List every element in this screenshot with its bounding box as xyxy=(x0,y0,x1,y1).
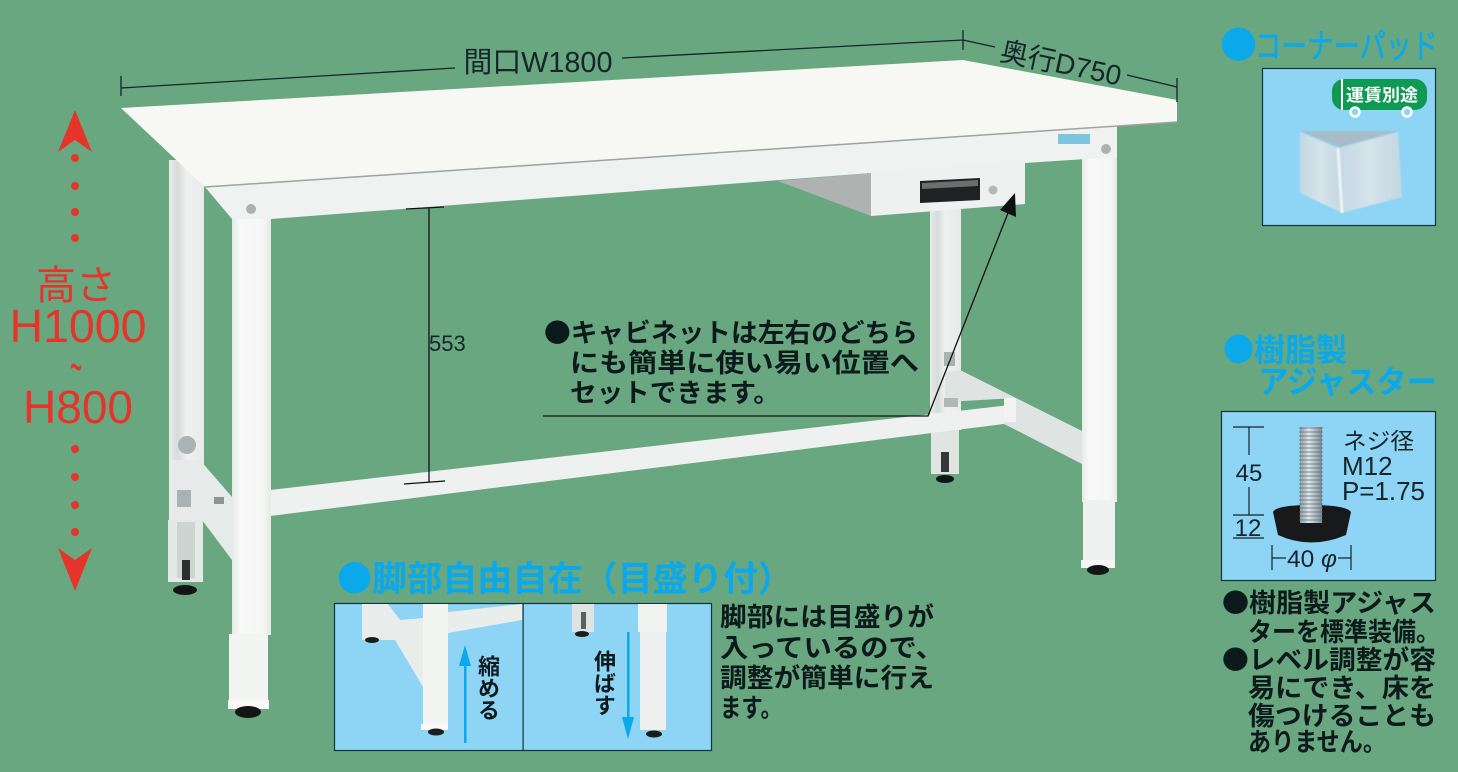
panel: adjuster xyxy=(1222,412,1436,580)
red down arrow xyxy=(58,548,92,591)
leg adjustment description: 調整が簡単に行え xyxy=(720,658,934,695)
brand label xyxy=(1058,134,1090,144)
shrink arrow xyxy=(459,645,471,743)
adjuster description xyxy=(1222,583,1440,759)
workbench illustration xyxy=(121,60,1177,718)
right side brace xyxy=(944,370,1082,464)
callout: cabinet: セットできます。 xyxy=(570,373,780,410)
adjuster description: ありません。 xyxy=(1248,722,1386,759)
adjuster description: 傷つけることも xyxy=(1248,696,1436,733)
height range xyxy=(10,110,147,591)
dimension: 45 and 12: 45 xyxy=(1236,460,1262,487)
front left leg xyxy=(228,190,271,718)
table apron xyxy=(205,125,1117,219)
leg adjustment description: 入っているので、 xyxy=(720,628,944,665)
extend label: 伸ばす xyxy=(589,650,621,716)
depth dimension xyxy=(963,36,1177,102)
back left leg xyxy=(168,160,204,595)
callout: cabinet xyxy=(543,193,1016,416)
height text: ~ xyxy=(70,336,82,399)
width dimension xyxy=(121,30,963,96)
depth dimension: 奥行D750 xyxy=(998,36,1124,91)
leader arrow xyxy=(543,213,1008,416)
left side brace xyxy=(170,436,232,560)
height text xyxy=(10,264,147,433)
dimension: 45 and 12: 12 xyxy=(1235,515,1261,542)
callout: cabinet: にも簡単に使い易い位置へ xyxy=(570,343,919,380)
leg adjustment description: 脚部には目盛りが xyxy=(720,597,934,634)
callout text: ●キャビネットは左右のどちら xyxy=(544,313,918,350)
thread specification: ネジ径 xyxy=(1343,428,1414,454)
dimension: 40 phi xyxy=(1272,545,1351,573)
heading: corner pad: ● xyxy=(1220,15,1257,69)
shrink label: 縮める xyxy=(473,655,505,721)
panel: leg adjustment xyxy=(334,603,712,750)
dimension: 40 phi: 40 φ xyxy=(1287,546,1337,573)
height text: H1000 xyxy=(10,300,147,352)
badge: shipping extra: 運賃別途 xyxy=(1346,86,1418,105)
leg adjustment description: ます。 xyxy=(720,688,782,725)
extend arrow xyxy=(622,632,634,739)
icon: corner pad xyxy=(1300,131,1402,213)
panel divider xyxy=(522,603,524,750)
width dimension: 間口W1800 xyxy=(464,47,612,79)
badge: shipping extra xyxy=(1332,79,1427,116)
thread specification: P=1.75 xyxy=(1342,476,1425,506)
panel: corner pad xyxy=(1262,68,1436,226)
icon: adjuster bolt xyxy=(1273,427,1351,542)
table top xyxy=(121,60,1177,187)
heading: resin adjuster: ●樹脂製 xyxy=(1223,325,1347,371)
dimension: 45 and 12 xyxy=(1233,427,1264,542)
heading: leg adjustment: ●脚部自由自在（目盛り付） xyxy=(337,551,793,602)
adjuster description: ●レベル調整が容 xyxy=(1222,640,1436,677)
adjuster description: 易にでき、床を xyxy=(1248,668,1436,705)
thread specification xyxy=(1342,428,1425,506)
shrink photo xyxy=(362,604,522,736)
adjuster description: ●樹脂製アジャス xyxy=(1222,583,1436,620)
apron bolts xyxy=(246,144,1111,214)
red up arrow xyxy=(58,110,92,152)
thread specification: M12 xyxy=(1342,451,1393,481)
lower cross bar xyxy=(270,405,1016,516)
clearance dimension 553 xyxy=(404,207,466,484)
clearance dimension 553: 553 xyxy=(429,331,466,356)
cabinet drawer xyxy=(778,160,1025,216)
back right leg xyxy=(930,205,961,483)
adjuster description: ターを標準装備。 xyxy=(1248,612,1440,649)
height text: H800 xyxy=(23,381,133,433)
front right leg xyxy=(1081,130,1117,575)
heading: resin adjuster xyxy=(1223,325,1437,403)
heading: resin adjuster: アジャスター xyxy=(1258,357,1437,403)
red dots xyxy=(71,154,79,536)
height text: 高さ xyxy=(36,264,116,308)
leg adjustment description xyxy=(720,597,944,725)
extend photo xyxy=(572,604,667,738)
